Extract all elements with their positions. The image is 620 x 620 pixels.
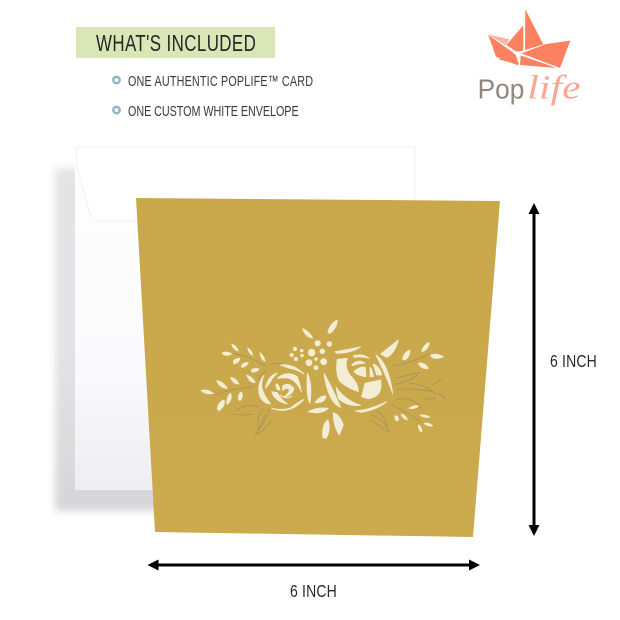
- heading: what's included: WHAT'S INCLUDED: [96, 30, 256, 57]
- list of included items: [113, 72, 313, 119]
- arrow: card height: [528, 203, 540, 536]
- envelope flap: [76, 147, 415, 221]
- envelope with shadow: [55, 147, 415, 511]
- gold pop-up card: [136, 198, 500, 537]
- logo: Poplife origami boat: life: [527, 70, 581, 107]
- heading: what's included: [76, 27, 275, 58]
- label: width 6 inch: 6 INCH: [290, 581, 337, 601]
- list of included items: ONE CUSTOM WHITE ENVELOPE: [128, 102, 299, 119]
- label: height 6 inch: 6 INCH: [550, 351, 597, 371]
- logo: Poplife origami boat: Pop: [478, 73, 524, 104]
- list of included items: ONE AUTHENTIC POPLIFE™ CARD: [128, 72, 313, 89]
- floral cut-out: left half: [201, 320, 337, 435]
- floral cut-out: right half: [323, 340, 445, 439]
- arrow: card width: [148, 560, 480, 570]
- logo: Poplife origami boat: [478, 9, 581, 107]
